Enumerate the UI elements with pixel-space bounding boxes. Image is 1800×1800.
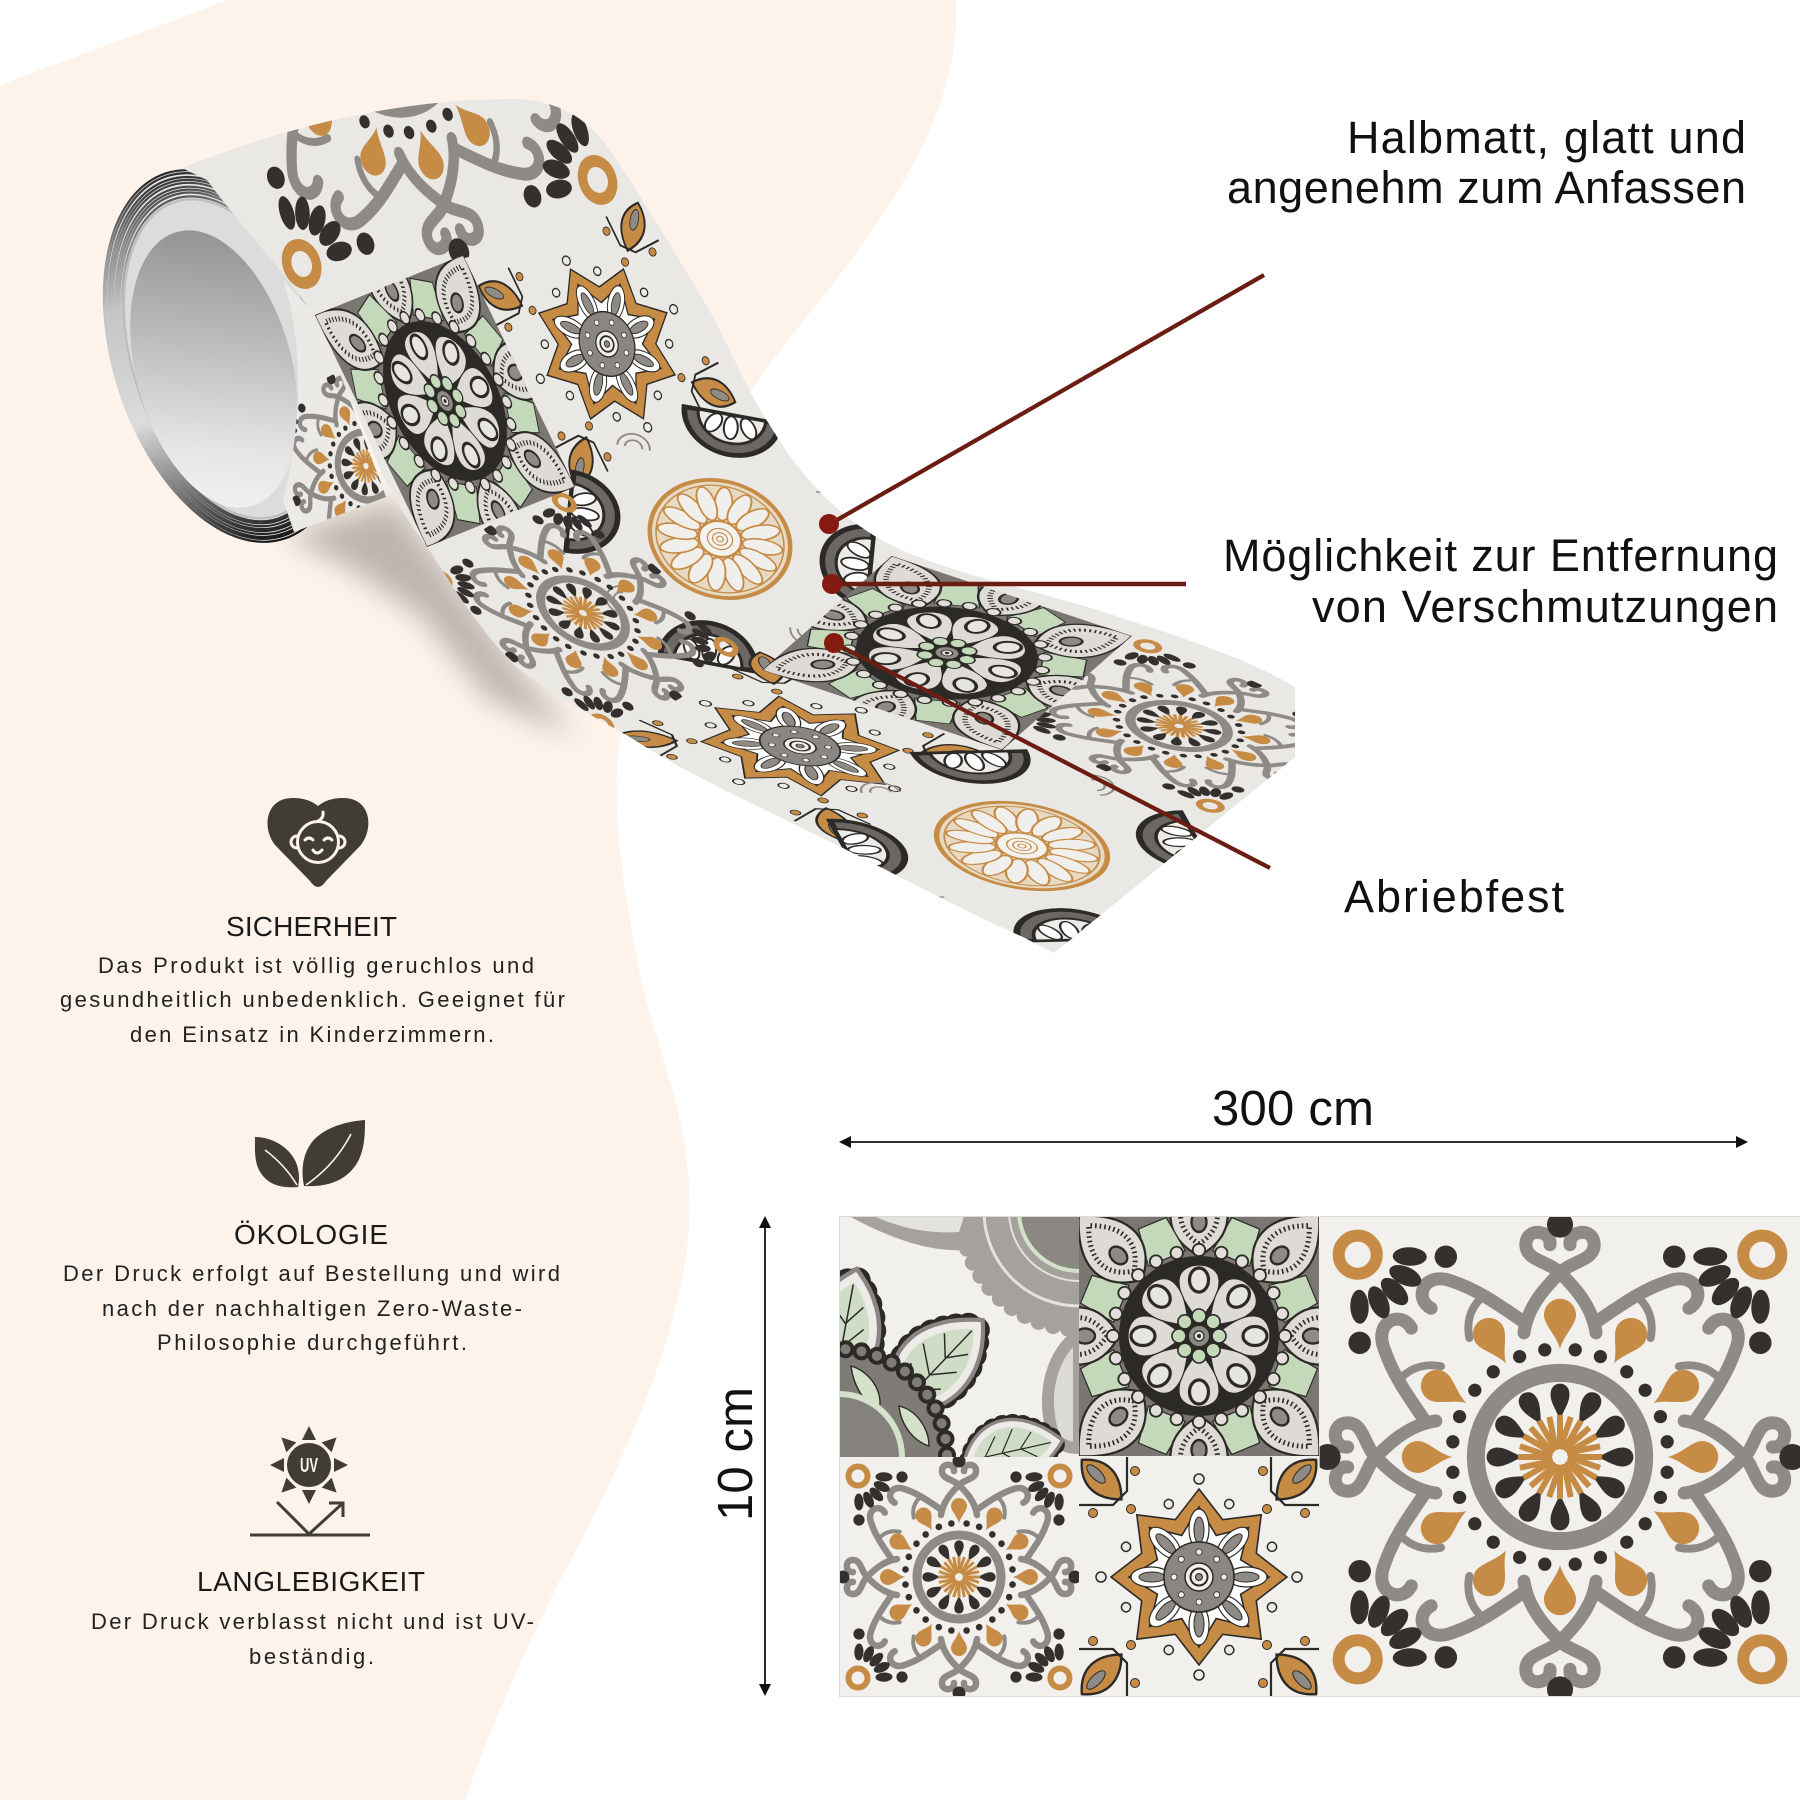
feature label: dirt removal: Möglichkeit zur Entfernung <box>1223 530 1778 581</box>
cast shadow under the roll <box>285 500 575 735</box>
icon: heart with baby face <box>268 798 368 887</box>
section: ecology: Philosophie durchgeführt. <box>157 1330 467 1355</box>
section: durability <box>91 1566 534 1669</box>
section: durability: LANGLEBIGKEIT <box>197 1566 425 1597</box>
tile: black mandala <box>1079 1217 1319 1456</box>
section: durability: beständig. <box>249 1644 374 1669</box>
product: wallpaper border roll with unrolled ribbon <box>60 0 1376 970</box>
section: durability: Der Druck verblasst nicht und ist UV- <box>91 1609 534 1634</box>
feature label: abrasion resistant: Abriebfest <box>1344 871 1564 922</box>
tile: small grey medallion <box>836 1454 1082 1700</box>
unrolled ribbon with mandala tiles <box>182 99 1295 953</box>
callout line 3 with dot <box>824 633 1270 868</box>
icon: UV sun with reflection arrow: UV <box>300 1455 318 1477</box>
feature label: semi-matte surface <box>1227 112 1746 213</box>
dimension: width 300 cm: 300 cm <box>1212 1082 1374 1136</box>
icon: UV sun with reflection arrow <box>250 1426 370 1535</box>
feature label: dirt removal: von Verschmutzungen <box>1312 581 1778 632</box>
feature label: semi-matte surface: angenehm zum Anfassen <box>1227 162 1746 213</box>
tile: orange star mandala <box>1079 1457 1319 1696</box>
callout line 2 with dot <box>822 574 1186 594</box>
icon: two leaves <box>255 1120 365 1187</box>
callout line 1 with dot <box>819 275 1264 534</box>
dimension: height 10 cm: 10 cm <box>709 1387 763 1521</box>
section: ecology: ÖKOLOGIE <box>234 1219 388 1250</box>
section: safety: Das Produkt ist völlig geruchlos und <box>98 953 534 978</box>
section: safety: den Einsatz in Kinderzimmern. <box>130 1022 494 1047</box>
lower wrap of the roll <box>283 281 386 532</box>
roll side with stacked layers <box>60 139 390 573</box>
dimension: width 300 cm <box>839 1082 1748 1148</box>
section: safety: SICHERHEIT <box>226 911 397 942</box>
section: safety <box>60 911 565 1047</box>
section: ecology: nach der nachhaltigen Zero-Waste- <box>102 1296 522 1321</box>
tile: leaf corner detail <box>840 1217 1079 1457</box>
dimension: height 10 cm <box>709 1216 771 1696</box>
tile: large grey medallion <box>1315 1212 1800 1702</box>
section: ecology <box>63 1219 560 1355</box>
feature label: semi-matte surface: Halbmatt, glatt und <box>1347 112 1746 163</box>
feature label: dirt removal <box>1223 530 1778 632</box>
flat pattern sample strip <box>839 1216 1800 1697</box>
section: safety: gesundheitlich unbedenklich. Geeignet für <box>60 987 565 1012</box>
roll inner hole <box>102 212 326 526</box>
section: ecology: Der Druck erfolgt auf Bestellung und wird <box>63 1261 560 1286</box>
